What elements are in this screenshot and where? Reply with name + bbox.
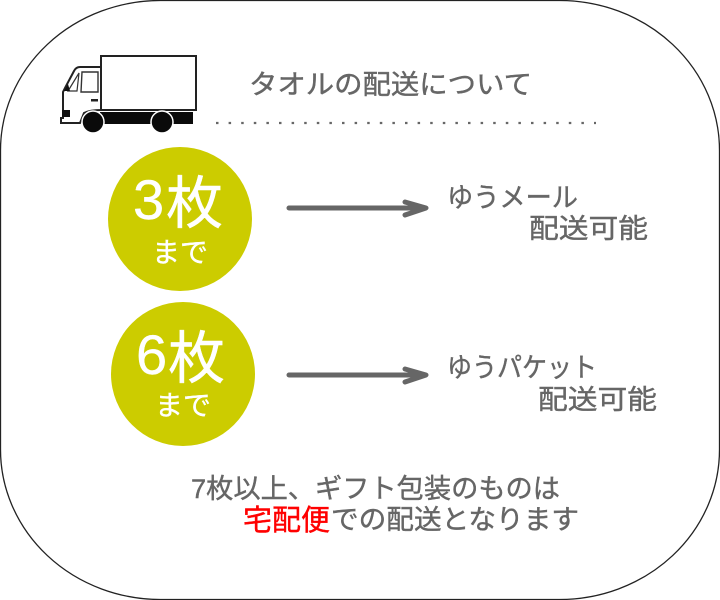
arrow: 6 sheets — [289, 369, 426, 382]
badge: 3 sheets: まで — [152, 237, 208, 268]
badge: 3 sheets: 3 — [133, 168, 164, 231]
badge: 6 sheets: 6 — [136, 323, 167, 386]
icon: truck — [61, 56, 196, 133]
label: yu-packet — [447, 353, 657, 415]
note text — [191, 474, 579, 537]
dotted divider — [216, 122, 596, 124]
label: yu-packet: 配送可能 — [538, 385, 657, 415]
badge: 6 sheets: まで — [155, 390, 211, 421]
heading: タオルの配送について — [249, 70, 532, 100]
badge: 6 sheets — [111, 302, 255, 446]
badge: 3 sheets: 枚 — [166, 172, 223, 236]
badge: 3 sheets — [108, 147, 252, 291]
label: yu-mail — [447, 183, 648, 244]
label: yu-mail: ゆうメール — [447, 183, 578, 213]
note text: 宅配便 — [243, 504, 330, 537]
label: yu-packet: ゆうパケット — [447, 353, 597, 383]
note text: での配送となります — [331, 505, 579, 535]
note text: 7枚以上、ギフト包装のものは — [191, 474, 560, 504]
badge: 6 sheets: 枚 — [168, 327, 225, 391]
label: yu-mail: 配送可能 — [529, 214, 648, 244]
arrow: 3 sheets — [289, 202, 426, 215]
